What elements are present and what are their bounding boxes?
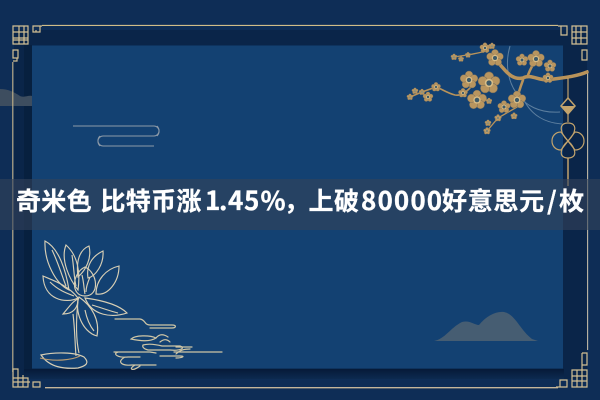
title: 上破 — [308, 182, 360, 218]
title: ， — [284, 182, 309, 218]
icon: distant mountain — [434, 312, 538, 341]
icon: cloud lines — [73, 126, 159, 146]
title: 80000 — [361, 181, 443, 218]
title: 比特币涨 — [100, 182, 202, 218]
title — [16, 181, 584, 218]
panel: translucent title band — [0, 179, 600, 230]
title: 好意思元 — [442, 182, 545, 218]
icon: hanging Chinese knot — [552, 78, 584, 186]
icon: corner knot bottom left — [13, 369, 40, 387]
icon: water ripples — [114, 319, 222, 369]
icon: corner knot top left — [13, 26, 42, 61]
icon: left edge mountain — [0, 89, 32, 106]
title: / — [547, 182, 557, 218]
title: 1 — [205, 181, 220, 218]
icon: pale arcs behind blossom — [507, 46, 562, 124]
icon: corner knot bottom right — [556, 353, 587, 387]
icon: lotus flower — [40, 241, 127, 368]
title: 5 — [244, 181, 259, 218]
icon: corner knot top right — [558, 26, 587, 60]
title: 4 — [228, 181, 243, 218]
title: . — [219, 181, 227, 218]
title: % — [260, 181, 286, 218]
icon: plum blossom branch — [407, 43, 587, 134]
title: 奇米色 — [16, 182, 92, 218]
panel: central blue card — [32, 46, 563, 368]
title: 枚 — [559, 182, 584, 218]
